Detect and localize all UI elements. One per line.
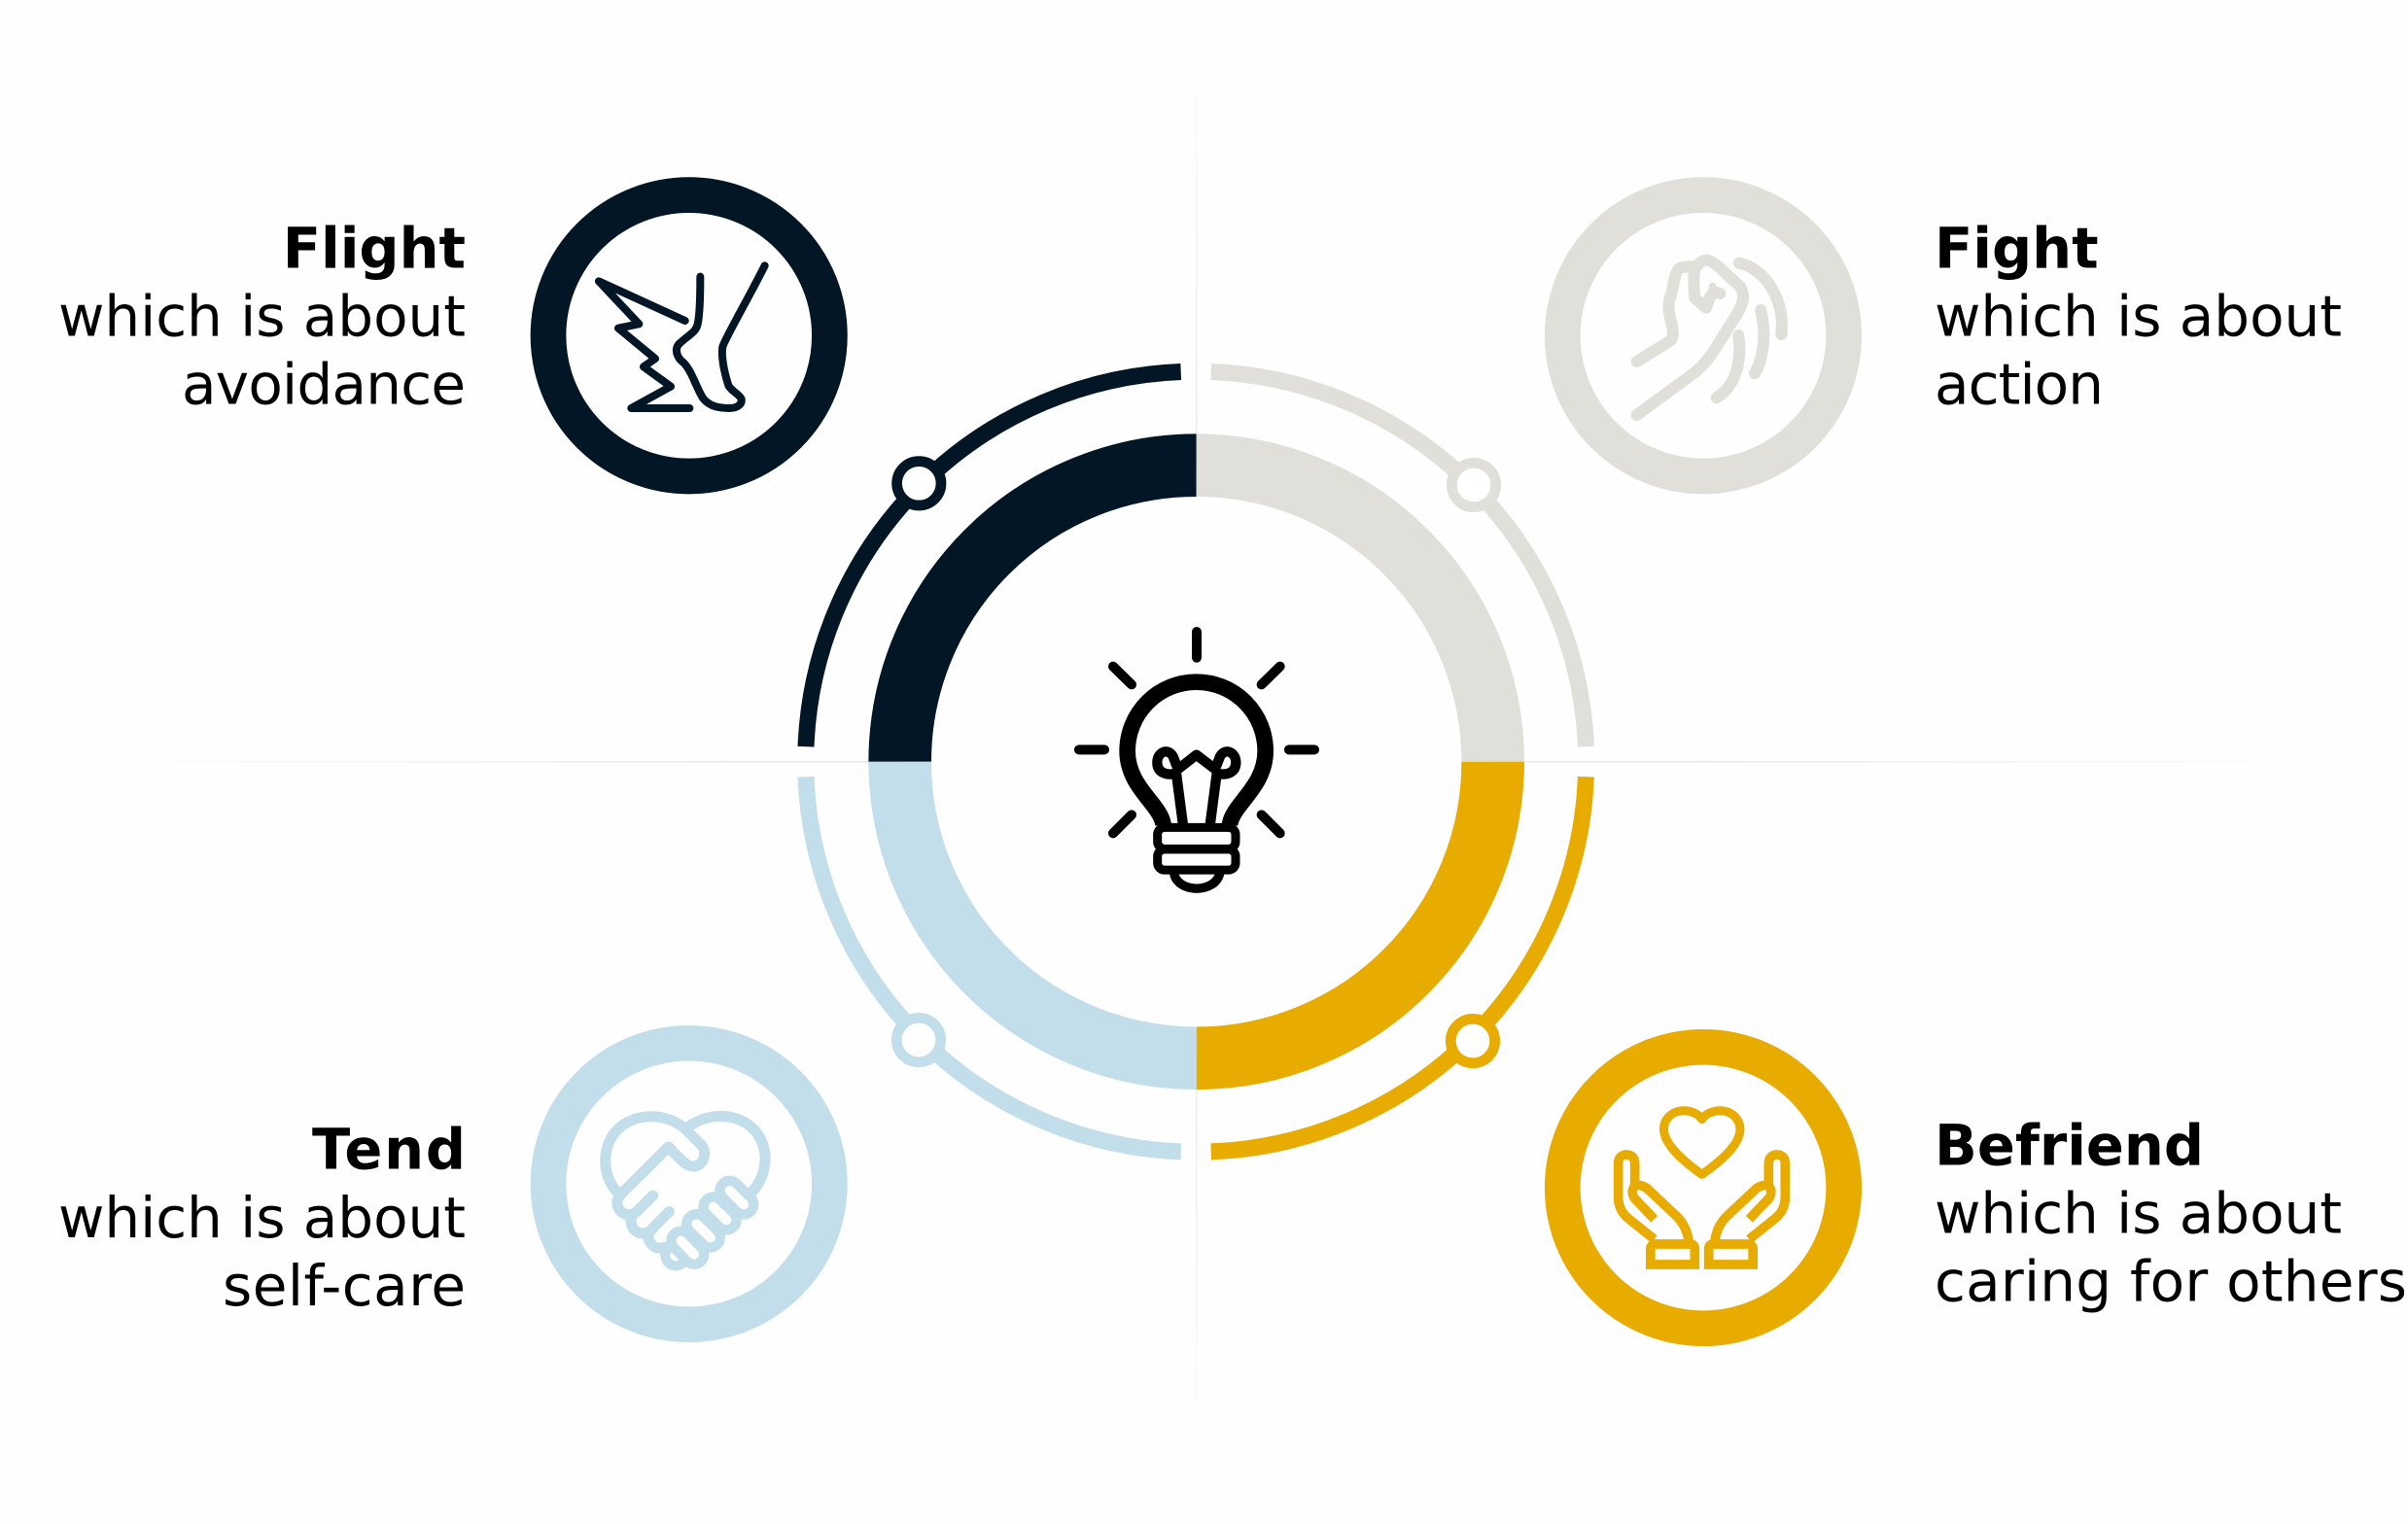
text: flight: avoidance xyxy=(182,352,466,418)
text: fight: action xyxy=(1935,352,2104,418)
text: befriend xyxy=(1935,1113,2407,1314)
node: tend xyxy=(896,1018,941,1062)
panel: fight xyxy=(1562,195,2342,476)
center disc xyxy=(905,470,1488,1054)
node: befriend xyxy=(1450,1019,1495,1063)
panel: befriend xyxy=(1562,1047,2407,1329)
ring: fight xyxy=(1562,195,1844,476)
icon: light bulb xyxy=(1079,632,1314,888)
text: fight: Fight xyxy=(1935,216,2099,282)
icon: running foot xyxy=(599,265,765,408)
outer arc: befriend xyxy=(1211,777,1586,1152)
ring: flight xyxy=(548,195,829,476)
text: tend xyxy=(58,1118,466,1319)
text: befriend: caring for others xyxy=(1935,1248,2407,1314)
text: tend: self-care xyxy=(223,1253,466,1319)
ring: tend xyxy=(548,1043,829,1325)
text: flight: Flight xyxy=(283,216,466,282)
panel: tend xyxy=(58,1043,829,1325)
text: tend: which is about xyxy=(58,1185,466,1251)
text: flight xyxy=(58,216,466,418)
segment: fight xyxy=(1197,466,1493,762)
text: befriend: which is about xyxy=(1935,1180,2342,1246)
segment: befriend xyxy=(1197,762,1493,1058)
text: befriend: Befriend xyxy=(1935,1113,2204,1178)
text: fight: which is about xyxy=(1935,284,2342,350)
segment: flight xyxy=(900,466,1197,762)
text: flight: which is about xyxy=(58,284,466,350)
outer arc: flight xyxy=(806,371,1181,746)
segment: tend xyxy=(900,762,1197,1058)
icon: hands holding heart xyxy=(1619,1111,1785,1264)
text: tend: Tend xyxy=(312,1118,466,1182)
central ring diagram xyxy=(806,371,1586,1152)
text: fight xyxy=(1935,216,2342,418)
icon: raised fist xyxy=(1637,260,1782,415)
node: flight xyxy=(897,462,941,505)
icon: handshake heart xyxy=(606,1116,765,1265)
node: fight xyxy=(1451,463,1496,507)
outer arc: tend xyxy=(806,777,1181,1152)
ring: befriend xyxy=(1562,1047,1844,1329)
panel: flight xyxy=(58,195,829,476)
outer arc: fight xyxy=(1211,371,1586,746)
